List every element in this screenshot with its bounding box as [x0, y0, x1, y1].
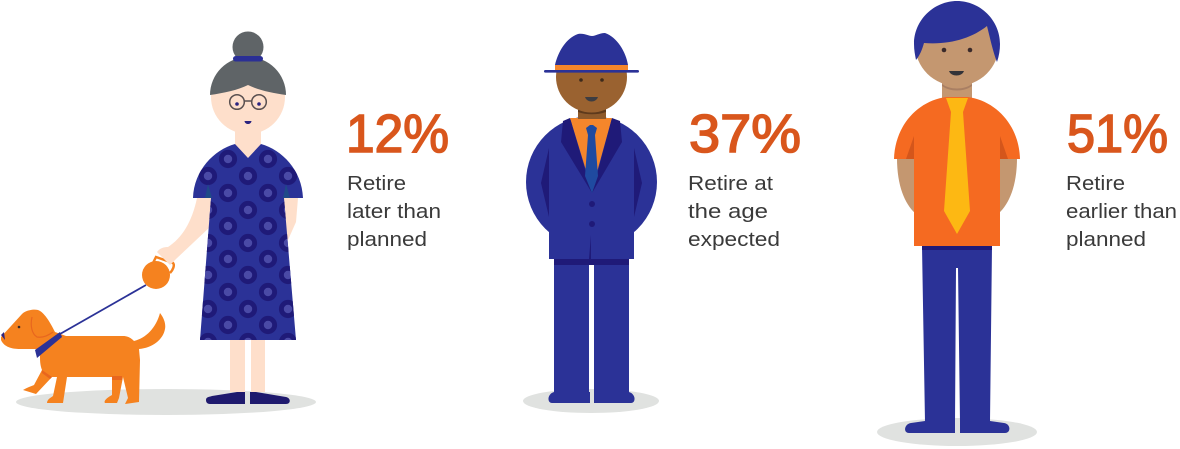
icon: head and hair	[914, 1, 1000, 102]
ground shadow	[523, 389, 659, 413]
icon: legs and shoes	[548, 258, 635, 403]
stat: 51%: 51%	[1067, 104, 1168, 164]
figure: man in orange shirt	[877, 1, 1037, 446]
icon: head and hat	[544, 33, 639, 119]
stat: 37%: Retire at	[688, 173, 773, 195]
stat: 12%: planned	[347, 229, 427, 251]
icon: dog	[1, 310, 165, 404]
stat: 51%	[1066, 104, 1177, 251]
stat: 51%: earlier than	[1066, 201, 1177, 223]
stat: 51%: Retire	[1066, 173, 1125, 195]
ground shadow	[16, 389, 316, 415]
icon: suit jacket	[526, 116, 657, 259]
icon: woman	[157, 32, 303, 404]
stat: 37%: 37%	[689, 104, 801, 164]
stat: 37%: expected	[688, 229, 780, 251]
stat: 51%: planned	[1066, 229, 1146, 251]
icon: leash handle	[60, 257, 174, 334]
ground shadow	[877, 418, 1037, 446]
stat: 37%: the age	[688, 201, 768, 223]
icon: shirt and arms	[894, 97, 1020, 246]
stat: 12%: 12%	[346, 104, 449, 164]
stat: 37%	[688, 104, 801, 251]
figure: woman walking dog	[1, 32, 316, 415]
stat: 12%	[346, 104, 449, 251]
figure: man in hat and suit	[523, 33, 659, 413]
icon: legs and shoes	[905, 246, 1009, 433]
stat: 12%: Retire	[347, 173, 406, 195]
stat: 12%: later than	[347, 201, 441, 223]
